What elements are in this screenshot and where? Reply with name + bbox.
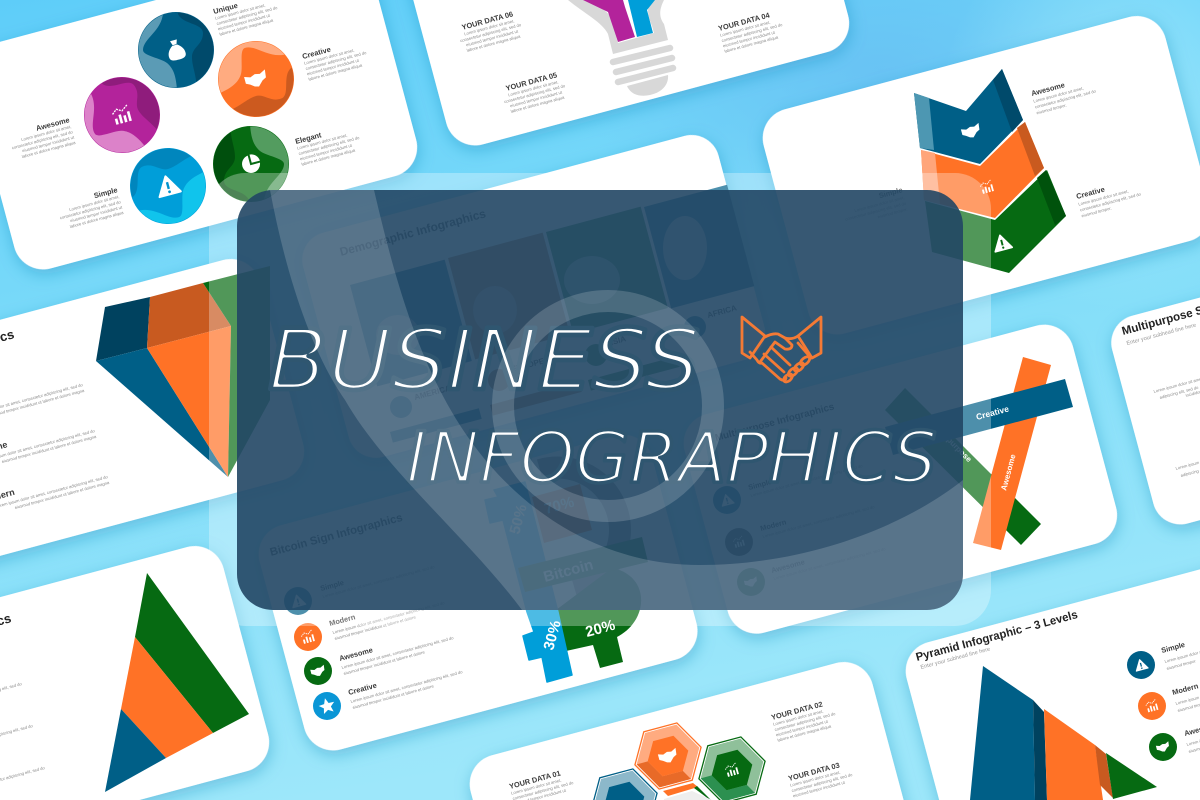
list: simple, modern, awesome: Lorem ipsum dolor sit amet, consectetur adipiscing elit, sed do xyxy=(773,546,887,581)
list: simple, modern, awesome: Lorem ipsum dolor sit amet, consectetur adipiscing elit, sed do xyxy=(762,504,876,539)
label: elegant xyxy=(294,121,363,167)
list item: awesome: eiusmod tempor incididunt ut labore et dolore xyxy=(343,649,426,676)
bar: blue creative xyxy=(885,379,1073,455)
panel: diamond slide xyxy=(0,252,311,580)
label: your data 04: Lorem ipsum dolor sit amet, xyxy=(720,20,771,38)
label: simple: consectetur adipiscing elit, sed do xyxy=(59,199,122,220)
label: simple: Lorem ipsum dolor sit amet, xyxy=(69,194,120,212)
label: your data 02: YOUR DATA 02 xyxy=(770,700,824,722)
label: your data 02: consectetur adipiscing elit, sed do xyxy=(774,711,837,732)
list item: awesome xyxy=(304,635,455,685)
hexagon: orange xyxy=(630,714,706,798)
label: your data 04: eiusmod tempor incididunt ut xyxy=(722,29,776,48)
label: elegant: consectetur adipiscing elit, sed do xyxy=(298,135,361,156)
label: simple: Simple xyxy=(93,185,119,200)
chevron: orange xyxy=(921,122,1044,218)
translucent frame xyxy=(209,173,991,626)
label: awesome: Lorem ipsum dolor sit amet, xyxy=(1033,86,1084,104)
label: awesome xyxy=(1030,73,1099,115)
diamond chart xyxy=(96,266,270,477)
label: your data 03: YOUR DATA 03 xyxy=(787,761,841,783)
heading: multipurpose: Multipurpose Infographics xyxy=(714,401,836,444)
list item: creative: Creative xyxy=(347,681,378,697)
map stats: ASIA xyxy=(606,334,627,348)
label: simple: eiusmod tempor incididunt ut xyxy=(70,204,123,223)
label: unique xyxy=(212,0,281,37)
label: your data 04: labore et dolore magna aliqua xyxy=(724,34,779,54)
hexagon: blue xyxy=(586,760,662,800)
label: simple: Lorem ipsum dolor sit amet, xyxy=(854,195,905,213)
text block: adipiscing elit, sed do xyxy=(1159,385,1200,400)
label: elegant: eiusmod tempor incididunt ut xyxy=(299,142,353,161)
panel: hexagon slide xyxy=(463,655,925,800)
map tiles xyxy=(350,185,754,386)
label: awesome xyxy=(0,416,97,472)
label: simple xyxy=(55,185,125,231)
label: your data 05 xyxy=(500,69,569,115)
heading: Pyramid Infographic – 3 Levels xyxy=(914,608,1079,664)
label: your data 05: eiusmod tempor incididunt ut xyxy=(510,89,563,108)
list item: creative xyxy=(313,669,464,720)
panel: light bulb slide xyxy=(394,0,856,152)
label: your data 02: eiusmod tempor incididunt ut xyxy=(775,718,829,737)
label: awesome: labore et dolore magna aliqua xyxy=(21,140,77,159)
label: awesome: consectetur adipiscing elit, sed do xyxy=(1034,88,1097,110)
label: unique: Lorem ipsum dolor sit amet, xyxy=(215,3,266,21)
circle: elegant xyxy=(213,126,289,202)
label: your data 06: YOUR DATA 06 xyxy=(461,9,514,32)
title panel xyxy=(237,190,963,610)
heading: bitcoin: Bitcoin Sign Infographics xyxy=(269,512,404,559)
panel: bitcoin slide xyxy=(252,428,704,757)
label: creative xyxy=(1075,176,1144,218)
label: your data 02 xyxy=(770,697,839,743)
label: simple: Simple xyxy=(878,185,904,200)
bitcoin chart: Bitcoin xyxy=(542,556,595,586)
label: your data 02: Lorem ipsum dolor sit amet, xyxy=(773,709,824,727)
bitcoin chart: 30% xyxy=(540,619,565,652)
label: elegant: labore et dolore magna aliqua xyxy=(301,147,356,167)
label: your data 01: Lorem ipsum dolor sit amet, xyxy=(511,778,562,796)
list item: simple: Lorem ipsum dolor sit amet, consectetur adipiscing elit, sed do xyxy=(322,564,436,599)
label: creative: Creative xyxy=(301,45,332,61)
panel: triangle slide xyxy=(0,539,276,800)
icon: light bulb xyxy=(568,0,673,96)
list item: modern: Lorem ipsum dolor sit amet, consectetur adipiscing elit, sed do xyxy=(332,600,446,635)
bar: green multipurpose: Multipurpose xyxy=(932,422,974,464)
hexagon: green xyxy=(694,728,770,800)
panel: circles slide xyxy=(0,0,424,276)
label: your data 03: Lorem ipsum dolor sit amet, xyxy=(790,770,841,788)
label: simple: consectetur adipiscing elit, sed do xyxy=(845,201,907,222)
label: your data 03: eiusmod tempor incididunt ut xyxy=(792,779,846,798)
label: elegant: Lorem ipsum dolor sit amet, xyxy=(297,133,348,151)
map stats: EUROPE xyxy=(510,356,546,374)
bar: green multipurpose xyxy=(885,388,1041,545)
list item: creative: Lorem ipsum dolor sit amet, consectetur adipiscing elit, sed do xyxy=(350,669,464,704)
label: unique: Unique xyxy=(212,1,239,16)
list: simple, modern, awesome xyxy=(713,463,887,596)
label: awesome: Awesome xyxy=(1030,80,1066,98)
icon: handshake xyxy=(742,317,821,384)
label: creative: consectetur adipiscing elit, sed do xyxy=(305,50,368,71)
list item: creative: eiusmod tempor incididunt ut labore et dolore xyxy=(352,683,435,710)
map stats xyxy=(390,303,738,443)
title: infographics: INFOGRAPHICS xyxy=(406,417,937,499)
label: simple: eiusmod tempor. xyxy=(877,206,908,219)
subhead: Enter your subhead line here xyxy=(1126,323,1197,347)
panel: chevron slide xyxy=(756,9,1200,341)
label: awesome xyxy=(7,115,77,161)
panel: demographic slide xyxy=(296,129,771,464)
label: awesome: Lorem ipsum dolor sit amet, xyxy=(21,124,72,142)
bar: blue creative: Creative xyxy=(975,404,1010,422)
bitcoin chart xyxy=(485,468,648,682)
list item: awesome xyxy=(1149,720,1200,761)
list: simple, modern, awesome: Simple xyxy=(747,477,773,492)
list: simple, modern, awesome: Awesome xyxy=(770,557,806,575)
label: your data 03: consectetur adipiscing elit, sed do xyxy=(791,772,854,793)
label: your data 01 xyxy=(508,766,576,800)
label: your data 02: labore et dolore magna aliqua xyxy=(777,723,832,743)
bitcoin chart: 70% xyxy=(543,494,576,518)
triangle chart xyxy=(105,573,249,792)
circle: simple xyxy=(130,148,206,224)
label: your data 06 xyxy=(456,8,525,54)
label: your data 06: Lorem ipsum dolor sit amet, xyxy=(464,18,515,36)
label: creative: labore et dolore magna aliqua xyxy=(308,62,363,82)
label: your data 06: consectetur adipiscing elit, sed do xyxy=(460,22,522,43)
list item: modern: Modern xyxy=(328,612,357,628)
label: your data 01: YOUR DATA 01 xyxy=(508,769,562,791)
label: creative: Lorem ipsum dolor sit amet, xyxy=(1078,189,1129,207)
list item: simple xyxy=(284,564,436,615)
label: your data 05: consectetur adipiscing elit, sed do xyxy=(504,83,566,104)
label: awesome: eiusmod tempor incididunt ut labore et dolore magna xyxy=(1,434,97,464)
chevron: green xyxy=(925,170,1066,273)
lens and ring overlay xyxy=(270,190,963,610)
label: unique: consectetur adipiscing elit, sed do xyxy=(216,5,279,26)
label: simple xyxy=(840,185,909,228)
map stats: AFRICA xyxy=(706,303,738,320)
label: creative: eiusmod tempor. xyxy=(1081,205,1112,218)
label: your data 05: YOUR DATA 05 xyxy=(505,70,558,93)
bitcoin chart: 20% xyxy=(584,617,617,641)
lines xyxy=(0,681,46,800)
label: your data 04 xyxy=(717,8,786,54)
label: simple: labore et dolore magna aliqua xyxy=(69,210,125,229)
list item: simple: eiusmod tempor xyxy=(1166,658,1197,671)
label: your data 05: Lorem ipsum dolor sit amet, xyxy=(508,79,559,97)
subhead: Enter your subhead line here xyxy=(920,647,991,671)
label: your data 06: eiusmod tempor incididunt ut xyxy=(466,28,519,47)
bitcoin chart: 50% xyxy=(506,503,531,536)
label: creative xyxy=(301,36,370,82)
circle: creative xyxy=(218,41,294,117)
map stats: AMERICA xyxy=(413,384,452,402)
list item: simple: Simple xyxy=(1160,640,1186,655)
label: your data 05: labore et dolore magna aliqua xyxy=(510,95,565,114)
label: your data 04: consectetur adipiscing elit, sed do xyxy=(721,22,784,43)
label: your data 04: YOUR DATA 04 xyxy=(717,10,771,33)
list item: awesome: Lorem ipsum dolor sit amet, consectetur adipiscing elit, sed do xyxy=(341,635,455,670)
label: awesome: eiusmod tempor. xyxy=(1036,102,1067,115)
list item: modern: Modern xyxy=(1171,681,1200,697)
hexagon: centre xyxy=(663,783,716,800)
heading: demographic: Demographic Infographics xyxy=(338,206,488,259)
label: awesome: Awesome xyxy=(35,115,71,133)
list item: simple xyxy=(1127,640,1200,679)
label: creative: eiusmod tempor incididunt ut xyxy=(306,57,360,76)
label: your data 03 xyxy=(787,758,855,798)
panel: cross bars slide xyxy=(677,318,1124,640)
label: awesome: consectetur adipiscing elit, sed do xyxy=(11,129,74,150)
panel: multipurpose slide xyxy=(1105,215,1200,531)
bar: orange awesome xyxy=(973,357,1051,550)
label: elegant: Elegant xyxy=(294,130,323,146)
list: simple, modern, awesome: Modern xyxy=(759,517,788,533)
list item: modern xyxy=(294,600,446,651)
label: unique: eiusmod tempor incididunt ut xyxy=(217,12,271,31)
circle: awesome xyxy=(84,77,160,153)
list item: modern: eiusmod tempor incididunt ut labore et dolore xyxy=(334,614,417,641)
label: modern: eiusmod tempor incididunt ut labore et dolore magna xyxy=(14,480,110,510)
text block xyxy=(1153,376,1200,478)
label: awesome: eiusmod tempor incididunt ut xyxy=(22,134,75,153)
label: creative: Creative xyxy=(1075,185,1106,201)
list: simple, modern, awesome: Lorem ipsum dolor sit amet, consectetur adipiscing elit, sed do xyxy=(750,463,864,498)
list item: awesome: Awesome xyxy=(338,645,374,663)
label: creative: consectetur adipiscing elit, sed do xyxy=(1079,191,1142,213)
pyramid chart xyxy=(970,666,1157,800)
circle: unique xyxy=(138,12,214,88)
label: unique: labore et dolore magna aliqua xyxy=(219,17,274,37)
label: creative: Lorem ipsum dolor sit amet, xyxy=(304,48,355,66)
bar: orange awesome: Awesome xyxy=(999,453,1018,492)
panel: pyramid slide xyxy=(899,542,1200,800)
list item: modern xyxy=(1138,681,1200,720)
label: your data 06: labore et dolore magna aliqua xyxy=(466,34,521,53)
title: business: BUSINESS xyxy=(268,311,700,409)
chevron: blue xyxy=(914,69,1023,164)
list item: simple: Simple xyxy=(319,578,345,593)
label: modern xyxy=(0,462,110,518)
